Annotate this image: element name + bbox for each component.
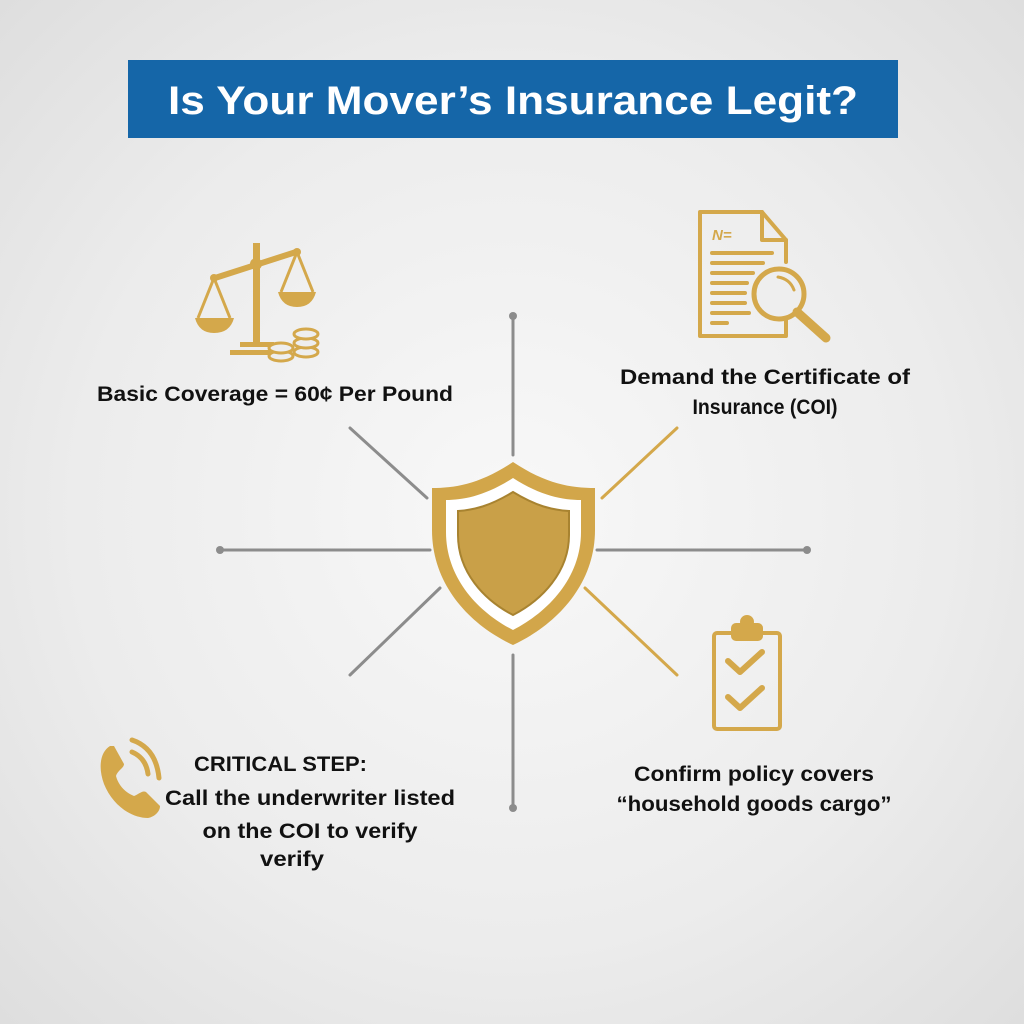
- text: confirm policy: “household goods cargo”: [616, 793, 892, 816]
- text: critical step: verify: [260, 848, 324, 871]
- connector lines: [216, 312, 811, 812]
- text: critical step: [165, 753, 455, 871]
- text: demand COI: Insurance (COI): [692, 396, 838, 419]
- title: [128, 60, 898, 138]
- text: critical step: CRITICAL STEP:: [194, 753, 367, 776]
- text: basic coverage: Basic Coverage = 60¢ Per Pound: [97, 383, 453, 406]
- icon: document with magnifier: N=: [712, 227, 732, 244]
- text: demand COI: [620, 366, 911, 419]
- text: critical step: on the COI to verify: [202, 820, 418, 843]
- icon: document with magnifier: [700, 212, 826, 338]
- title: Is Your Mover’s Insurance Legit?: [168, 79, 858, 123]
- text: demand COI: Demand the Certificate of: [620, 366, 911, 389]
- text: critical step: Call the underwriter listed: [165, 787, 455, 810]
- icon: phone: [101, 740, 160, 818]
- icon: central shield: [432, 462, 595, 645]
- icon: scales and coins: [195, 243, 318, 361]
- icon: clipboard checklist: [714, 617, 780, 729]
- text: confirm policy: Confirm policy covers: [634, 763, 874, 786]
- text: confirm policy: [616, 763, 892, 816]
